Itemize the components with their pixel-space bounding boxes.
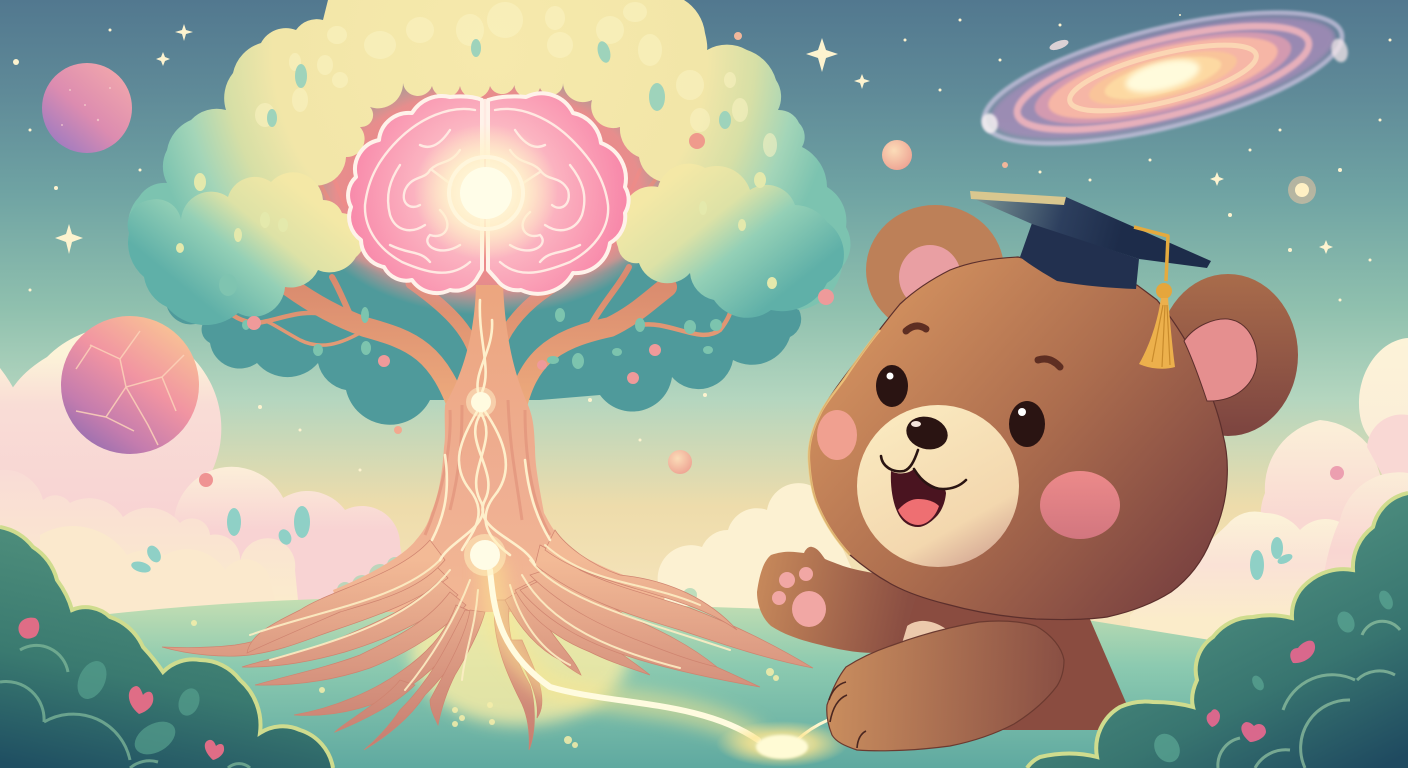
canopy: crown	[128, 0, 850, 310]
eyebrows	[906, 326, 1060, 367]
floating leaves	[130, 506, 1294, 580]
canopy: lower dark layer	[167, 240, 801, 425]
waving arm and paw	[757, 547, 918, 653]
head rim light	[809, 330, 880, 555]
ear right inner	[1184, 319, 1257, 401]
brain halo	[298, 65, 678, 315]
leaves and buds	[176, 39, 777, 384]
glowing path	[464, 534, 848, 767]
clouds: behind trunk right	[658, 483, 870, 610]
trunk shading	[425, 400, 550, 535]
resting arm	[827, 621, 1064, 751]
graduation cap	[970, 191, 1211, 369]
galaxy satellite cloud	[1048, 38, 1070, 52]
tree	[128, 0, 850, 750]
brain	[348, 93, 629, 294]
bear	[757, 191, 1298, 751]
halo: dusky opening behind brain	[278, 65, 698, 285]
bear body	[880, 590, 1127, 730]
muzzle	[857, 405, 1019, 567]
canopy: yellow bokeh	[255, 2, 777, 157]
clouds: right	[1130, 338, 1408, 670]
mouth	[881, 450, 966, 527]
branches	[224, 170, 733, 420]
canopy: left lobe	[128, 172, 365, 325]
chest patch	[893, 621, 958, 665]
distant shrubs	[337, 557, 697, 602]
nose	[903, 412, 951, 454]
root highlights	[250, 545, 730, 690]
ground glow	[410, 575, 630, 725]
bushes: left	[0, 527, 333, 768]
roots	[162, 530, 813, 750]
ear left	[866, 205, 1004, 335]
cheeks	[1040, 471, 1120, 539]
planet: large veined	[61, 316, 199, 454]
floating orbs	[199, 133, 1344, 487]
eyes	[876, 365, 1045, 447]
stars	[13, 14, 1392, 472]
clouds: left	[0, 327, 410, 620]
head	[809, 257, 1227, 620]
planet: small purple pink	[42, 63, 132, 153]
canopy: right lobe	[616, 164, 844, 318]
ear right	[1158, 274, 1298, 436]
ground flowers	[191, 620, 779, 748]
galaxy	[970, 0, 1355, 171]
bushes: right	[1027, 493, 1408, 768]
ground	[0, 597, 1408, 768]
trunk node upper	[466, 387, 496, 417]
trunk	[333, 285, 667, 612]
glowing strands	[432, 300, 550, 565]
